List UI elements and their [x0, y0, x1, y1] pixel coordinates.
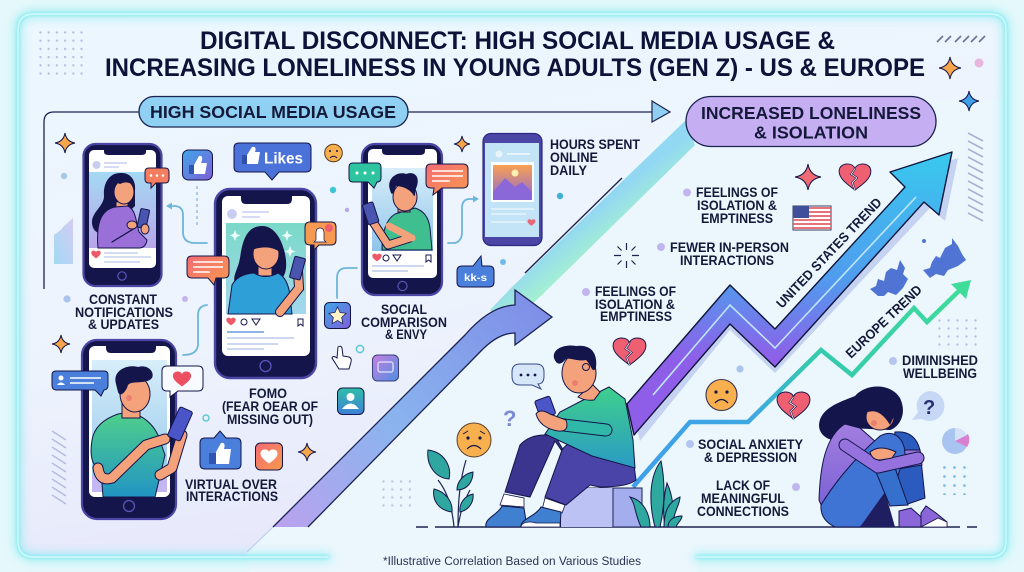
icon: US flag	[793, 206, 831, 230]
bullet label: diminished wellbeing: WELLBEING	[903, 366, 977, 381]
bullet label: lack of connections	[697, 478, 800, 519]
bullet label: lack of connections: MEANINGFUL	[701, 491, 785, 506]
likes badge	[234, 143, 311, 180]
label: virtual over interactions: VIRTUAL OVER	[185, 477, 277, 492]
heart bubble	[162, 366, 203, 397]
question bubble: ?	[923, 397, 935, 419]
icon: Europe maps	[870, 238, 966, 296]
bullet label: feelings of isolation (upper): EMPTINESS	[701, 211, 773, 226]
plant right of block	[630, 461, 682, 527]
phone: man with green shirt (bottom left)	[82, 340, 193, 519]
bullet label: fewer in-person: INTERACTIONS	[680, 253, 774, 268]
icon: sad emoji small	[325, 144, 342, 162]
label: hours spent online: ONLINE	[550, 150, 598, 165]
seated block	[561, 488, 642, 527]
phone: man in green (top right)	[362, 144, 442, 295]
kks bubble	[457, 256, 494, 287]
bell notification bubble	[305, 222, 336, 250]
label: fomo	[222, 386, 318, 427]
title	[105, 27, 925, 82]
connector arrow from usage to loneliness	[44, 101, 670, 289]
icon: sad emoji centre	[706, 380, 737, 410]
bullet label: social anxiety	[686, 437, 803, 465]
footnote: *Illustrative Correlation Based on Various Studies	[383, 554, 641, 568]
label: fomo: FOMO	[249, 386, 287, 401]
seated man	[486, 346, 636, 527]
icon: heart tile	[256, 443, 282, 470]
phone: woman in blue (centre)	[215, 189, 316, 378]
label: fomo: MISSING OUT)	[227, 412, 313, 427]
bullet label: fewer in-person: FEWER IN-PERSON	[670, 240, 789, 255]
question bubble	[912, 391, 944, 421]
Europe trend label: EUROPE TREND	[843, 282, 925, 361]
connector arrows between phones	[166, 186, 479, 355]
icon: hand cursor	[332, 346, 351, 369]
phone: hours online	[483, 134, 542, 246]
big diagonal arrow	[247, 290, 552, 552]
label: fomo: (FEAR OEAR OF	[222, 399, 318, 414]
bullet label: feelings of isolation (lower): ISOLATION &	[595, 297, 675, 312]
light diagonal band	[490, 120, 695, 325]
heading pill: increased loneliness: INCREASED LONELINESS	[701, 103, 921, 123]
bullet label: diminished wellbeing	[889, 353, 978, 381]
label: constant notifications: CONSTANT	[89, 292, 158, 307]
bullet label: social anxiety: & DEPRESSION	[704, 450, 797, 465]
red chat bubble	[426, 164, 468, 195]
bullet label: feelings of isolation (upper)	[683, 185, 778, 226]
phone: woman in purple	[84, 144, 162, 286]
icon: thumbs up tile	[182, 150, 212, 180]
bullet label: feelings of isolation (lower): FEELINGS OF	[595, 284, 676, 299]
message bubble: profile	[52, 371, 108, 396]
bullet label: feelings of isolation (upper): FEELINGS OF	[696, 185, 778, 200]
bullet label: social anxiety: SOCIAL ANXIETY	[698, 437, 803, 452]
label: virtual over interactions: INTERACTIONS	[186, 489, 278, 504]
label: social comparison: COMPARISON	[361, 315, 447, 330]
plant with sad emoji	[428, 423, 491, 527]
small colored dots	[61, 173, 744, 421]
bullet label: lack of connections: LACK OF	[716, 478, 770, 493]
icon: like bubble	[200, 431, 241, 469]
heading pill: increased loneliness	[686, 96, 936, 146]
label: hours spent online	[550, 137, 641, 178]
speech bubble and question mark: ?	[503, 406, 516, 431]
title: DIGITAL DISCONNECT: HIGH SOCIAL MEDIA USAGE &	[200, 27, 835, 55]
label: social comparison: SOCIAL	[381, 302, 427, 317]
decorative dot grids and hatches	[38, 30, 985, 508]
US trend label: UNITED STATES TREND	[773, 195, 885, 311]
bullet label: feelings of isolation (lower): EMPTINESS	[600, 309, 672, 324]
Europe trend line	[633, 280, 971, 487]
heading pill: high social media usage	[139, 96, 408, 127]
label: social comparison: & ENVY	[385, 327, 427, 342]
bullet label: diminished wellbeing: DIMINISHED	[902, 353, 978, 368]
heading pill: high social media usage: HIGH SOCIAL MEDIA USAGE	[150, 102, 396, 122]
bullet label: fewer in-person	[657, 240, 789, 268]
sparkles	[52, 57, 984, 461]
label: social comparison	[361, 302, 447, 342]
green chat bubble	[349, 163, 381, 188]
US trend arrow	[627, 152, 958, 441]
speech bubble and question mark	[503, 364, 544, 431]
icons: broken hearts	[613, 164, 871, 419]
icon: burst	[614, 243, 639, 268]
label: virtual over interactions	[185, 477, 278, 504]
orange chat bubble	[187, 256, 229, 285]
title: INCREASING LONELINESS IN YOUNG ADULTS (GEN Z) - US & EUROPE	[105, 54, 925, 82]
icon: star tile	[324, 302, 350, 328]
label: constant notifications: NOTIFICATIONS	[75, 305, 173, 320]
pie chart icon	[942, 428, 969, 454]
heading pill: increased loneliness: & ISOLATION	[754, 122, 868, 142]
label: hours spent online: HOURS SPENT	[550, 137, 641, 152]
ground line	[416, 526, 977, 528]
label: constant notifications	[75, 292, 173, 332]
chat bubble on phone one	[145, 168, 169, 188]
label: hours spent online: DAILY	[550, 163, 587, 178]
icon: chat tile	[372, 355, 398, 381]
bullet label: feelings of isolation (upper): ISOLATION &	[697, 198, 777, 213]
likes badge: Likes	[264, 150, 303, 168]
bullet label: feelings of isolation (lower)	[582, 284, 676, 324]
kks bubble: kk-s	[464, 273, 488, 284]
icon: person tile	[338, 388, 364, 414]
label: constant notifications: & UPDATES	[88, 317, 159, 332]
sitting woman	[819, 386, 947, 527]
bullet label: lack of connections: CONNECTIONS	[697, 504, 789, 519]
